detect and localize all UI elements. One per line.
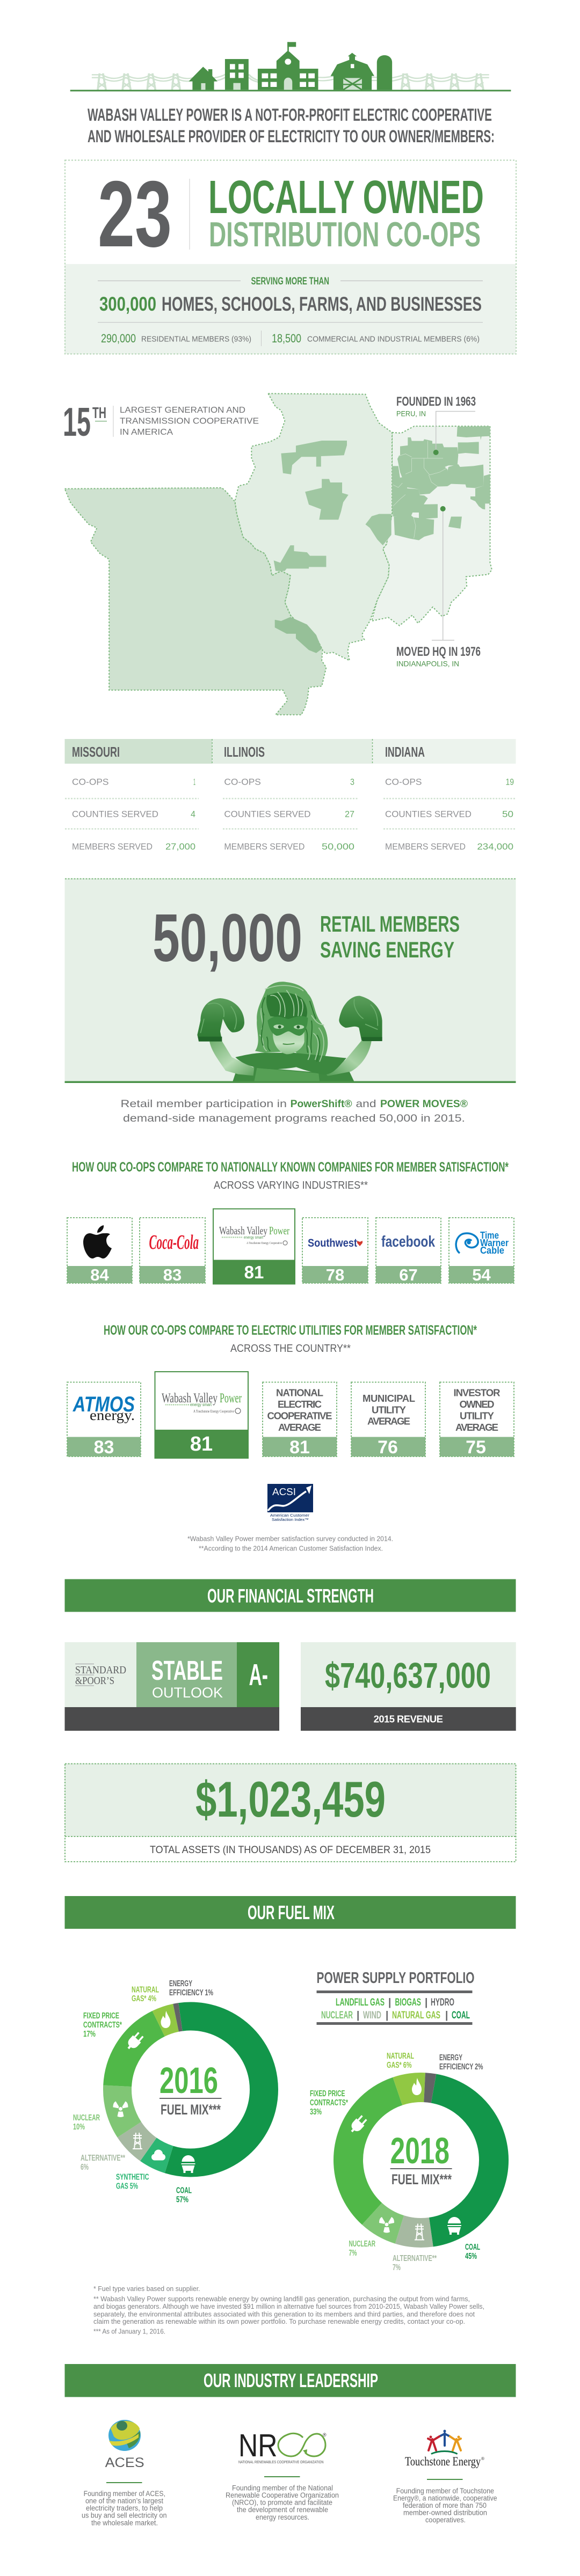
card: Apple 84: 84 [90, 1265, 109, 1284]
panel: total assets: $1,023,459 [195, 1771, 386, 1827]
center label: 2016 [160, 2060, 218, 2101]
card: Facebook 67: 67 [399, 1265, 418, 1284]
card: Wabash Valley Power 81: Wabash Valley [219, 1224, 267, 1237]
ACES description [82, 2490, 167, 2527]
label: moved HQ in 1976: INDIANAPOLIS, IN [396, 659, 459, 668]
card: Wabash Valley Power 81: energy smart [190, 1402, 212, 1407]
footnotes: satisfaction sources [187, 1535, 393, 1552]
section banner: our financial strength: OUR FINANCIAL STRENGTH [207, 1585, 374, 1607]
table: state statistics: 1 [193, 777, 195, 787]
segment labels: 17% [83, 2030, 96, 2039]
panel: 2015 revenue [301, 1642, 516, 1731]
segment icons [113, 2011, 195, 2173]
power supply portfolio legend: | [386, 2010, 388, 2021]
column: Missouri: 4 [191, 809, 195, 819]
center label [160, 2060, 221, 2118]
intro statement [88, 105, 495, 146]
panel: Standard and Poor's rating [64, 1642, 279, 1731]
Touchstone description: federation of more than 750 [403, 2501, 487, 2509]
card: Facebook 67 [381, 1233, 436, 1284]
panel: 2015 revenue: $740,637,000 [325, 1656, 491, 1696]
segment labels: GAS 5% [116, 2182, 138, 2191]
score cards: national companies [67, 1209, 514, 1285]
15th largest callout [63, 399, 259, 444]
table: state statistics [64, 739, 516, 852]
Touchstone description: cooperatives. [425, 2516, 466, 2524]
card: Time Warner Cable 54: 54 [472, 1265, 491, 1284]
Touchstone description: member-owned distribution [403, 2508, 487, 2517]
power supply portfolio legend: POWER SUPPLY PORTFOLIO [317, 1970, 475, 1987]
column: Indiana: COUNTIES SERVED [385, 809, 472, 819]
state: Indiana [372, 426, 492, 626]
section banner: our fuel mix: OUR FUEL MIX [248, 1901, 335, 1923]
card: national electric cooperative average 81: COOPERATIVE [267, 1410, 332, 1421]
segment labels: CONTRACTS* [310, 2098, 349, 2107]
panel: 2015 revenue: 2015 REVENUE [374, 1713, 443, 1725]
score cards: electric utilities [67, 1372, 514, 1458]
logo: Touchstone Energy [405, 2430, 484, 2468]
power supply portfolio legend: | [388, 1997, 391, 2008]
ACES description: Founding member of ACES, [84, 2490, 165, 2498]
segment labels: NUCLEAR [73, 2113, 100, 2123]
label: moved HQ in 1976: MOVED HQ IN 1976 [396, 645, 481, 659]
NRCO description: energy resources. [256, 2513, 309, 2521]
column: Missouri: 27,000 [165, 841, 195, 852]
homes statement: 300,000 [99, 293, 156, 315]
panel: total assets: TOTAL ASSETS (IN THOUSANDS) AS OF DECEMBER 31, 2015 [150, 1845, 431, 1856]
S&P wordmark: &POOR’S [75, 1675, 114, 1687]
logo: ACSI: American Customer [270, 1513, 310, 1518]
map: Missouri, Illinois, Indiana service territory [65, 393, 492, 715]
card: Wabash Valley Power 81 [213, 1209, 295, 1285]
leader lines and location pins [432, 411, 475, 640]
S&P wordmark [75, 1664, 126, 1687]
card: municipal utility average 76: 76 [378, 1437, 398, 1458]
card: Apple 84 [83, 1225, 112, 1284]
logo: NRCO: NATIONAL RENEWABLES COOPERATIVE ORGANIZATION [238, 2460, 324, 2464]
text block: retail participation: Retail member participation in [120, 1098, 287, 1110]
column: Illinois: MEMBERS SERVED [224, 841, 305, 852]
member breakdown: 290,000 [101, 332, 136, 345]
column: Indiana: 50 [502, 809, 513, 819]
segment labels: NATURAL [132, 1986, 159, 1994]
label: founded in 1963: FOUNDED IN 1963 [396, 394, 476, 409]
segment labels: EFFICIENCY 2% [439, 2062, 483, 2072]
text block: retail participation: demand-side management programs reached 50,000 in 2015. [123, 1113, 465, 1124]
segment labels: COAL [176, 2186, 192, 2196]
segment labels [310, 2052, 483, 2272]
column: Illinois: CO-OPS [224, 777, 261, 787]
column: Illinois: COUNTIES SERVED [224, 809, 310, 819]
column: Missouri: COUNTIES SERVED [72, 809, 158, 819]
center label: FUEL MIX*** [161, 2102, 221, 2118]
column: Indiana: INDIANA [385, 744, 425, 760]
card: Atmos Energy 83: 83 [94, 1437, 114, 1458]
card: Wabash Valley Power 81: A Touchstone Energy Cooperative [247, 1242, 282, 1245]
card: municipal utility average 76 [363, 1393, 415, 1458]
card: Atmos Energy 83: energy. [90, 1407, 135, 1423]
card: Southwest 78: 78 [326, 1265, 344, 1284]
segment labels: SYNTHETIC [116, 2173, 149, 2182]
card: national electric cooperative average 81: AVERAGE [278, 1422, 321, 1433]
footnotes: fuel mix: and biogas generators. Although we have invested $91 million in alternative fuel sources from 2010-2015, Wabash Valley Power sells, [93, 2302, 484, 2310]
segment labels: 33% [310, 2107, 322, 2117]
ACES description: one of the nation’s largest [85, 2497, 163, 2505]
member breakdown: RESIDENTIAL MEMBERS (93%) [141, 335, 251, 343]
segment labels: 6% [81, 2163, 89, 2172]
card: Wabash Valley Power 81 [155, 1372, 248, 1458]
panel: 50,000 retail members [64, 879, 516, 1083]
segment labels: FIXED PRICE [310, 2089, 345, 2098]
segment labels: EFFICIENCY 1% [169, 1988, 213, 1997]
card: Wabash Valley Power 81: Wabash Valley [162, 1391, 218, 1406]
Touchstone description [393, 2487, 497, 2524]
text block: retail participation: and [356, 1098, 376, 1110]
footnotes: fuel mix: separately, the environmental attributes associated with this generation to its members and third parties, and therefore does not [93, 2310, 475, 2318]
card: Southwest 78: Southwest [308, 1237, 357, 1249]
footnotes: fuel mix: *** As of January 1, 2016. [93, 2327, 165, 2336]
Touchstone description: Energy®, a nationwide, cooperative [393, 2494, 497, 2502]
card: investor owned utility average 75: INVESTOR [453, 1387, 501, 1399]
heading: national companies comparison [72, 1160, 509, 1191]
card: Wabash Valley Power 81: A Touchstone Energy Cooperative [193, 1409, 234, 1414]
panel: 23 locally owned co-ops [64, 160, 516, 354]
Touchstone description: Founding member of Touchstone [396, 2487, 494, 2495]
logo: ACES globe: ACES [105, 2455, 144, 2470]
card: municipal utility average 76: UTILITY [372, 1404, 407, 1416]
stable outlook: STABLE [151, 1655, 223, 1686]
NRCO description: the development of renewable [237, 2506, 328, 2514]
column: Indiana: MEMBERS SERVED [385, 841, 466, 852]
center label: FUEL MIX*** [392, 2171, 452, 2187]
column: Missouri [72, 744, 195, 852]
segment icons [348, 2078, 461, 2240]
card: Time Warner Cable 54: Warner [480, 1238, 509, 1248]
headline [208, 171, 484, 254]
power supply portfolio legend: LANDFILL GAS [336, 1997, 385, 2008]
segment labels: NUCLEAR [349, 2240, 375, 2249]
card: national electric cooperative average 81: ELECTRIC [278, 1399, 322, 1410]
footnotes: fuel mix [93, 2285, 484, 2336]
logo: ACSI [267, 1484, 313, 1522]
15th largest callout: TH [92, 405, 106, 422]
column: Missouri: MEMBERS SERVED [72, 841, 153, 852]
column: Missouri: CO-OPS [72, 777, 108, 787]
footnotes: fuel mix: claim the generation as renewable within its own power portfolio. To purchase renewable energy credits, contact your co-op. [93, 2317, 465, 2325]
card: investor owned utility average 75: OWNED [460, 1399, 494, 1410]
Indiana county blocks [392, 426, 490, 540]
column: Touchstone Energy [393, 2430, 497, 2524]
logo: NRCO: NR [238, 2428, 277, 2463]
power supply portfolio legend: NUCLEAR [321, 2010, 353, 2021]
ACES description: us buy and sell electricity on [82, 2512, 167, 2519]
ACES description: the wholesale market. [91, 2519, 158, 2527]
card: Wabash Valley Power 81: Power [220, 1391, 242, 1406]
power supply portfolio legend: COAL [452, 2010, 470, 2021]
retail members heading [320, 911, 460, 962]
segment labels: 57% [176, 2196, 189, 2205]
column: Indiana: CO-OPS [385, 777, 422, 787]
column: Indiana: 234,000 [477, 841, 513, 852]
segment labels: GAS* 6% [387, 2061, 411, 2070]
15th largest callout: IN AMERICA [120, 428, 173, 437]
segment labels: 7% [349, 2249, 357, 2258]
big number 50,000: 50,000 [153, 900, 302, 976]
segment labels: GAS* 4% [132, 1994, 156, 2003]
15th largest callout: TRANSMISSION COOPERATIVE [120, 416, 259, 426]
center label: 2018 [390, 2130, 450, 2171]
section banner: our industry leadership: OUR INDUSTRY LEADERSHIP [204, 2369, 378, 2391]
card: Facebook 67: facebook [381, 1233, 436, 1250]
segment labels: 45% [465, 2252, 477, 2261]
illustration: child superhero with boxing gloves [197, 982, 382, 1081]
segment labels: ENERGY [169, 1979, 192, 1988]
big number 23: 23 [98, 162, 172, 267]
card: national electric cooperative average 81: NATIONAL [276, 1387, 323, 1399]
footnotes: satisfaction sources: *Wabash Valley Power member satisfaction survey conducted in 2014. [187, 1535, 393, 1542]
card: Wabash Valley Power 81: energy smart [244, 1236, 263, 1240]
label: founded in 1963: PERU, IN [396, 409, 426, 418]
heading: national companies comparison: ACROSS VARYING INDUSTRIES** [214, 1180, 368, 1191]
power supply portfolio legend [317, 1970, 475, 2025]
logo: NRCO: ® [323, 2432, 327, 2438]
section banner: our financial strength [64, 1579, 516, 1612]
panel: total assets [64, 1763, 516, 1862]
logo: Touchstone Energy: ® [481, 2456, 484, 2461]
segment labels: 10% [73, 2123, 85, 2132]
card: Atmos Energy 83: ATMOS [73, 1393, 135, 1416]
segment labels: COAL [465, 2243, 480, 2252]
column: Illinois: 3 [350, 777, 354, 787]
NRCO description: Renewable Cooperative Organization [226, 2491, 339, 2499]
retail members heading: RETAIL MEMBERS [320, 911, 460, 936]
icon: town skyline with power lines [70, 42, 511, 91]
power supply portfolio legend: WIND [363, 2010, 381, 2021]
homes statement [99, 293, 482, 315]
segment labels: CONTRACTS* [83, 2021, 122, 2030]
S&P wordmark: STANDARD [75, 1664, 126, 1676]
column: Indiana [385, 744, 514, 852]
logo: Touchstone Energy: Touchstone Energy [405, 2455, 481, 2468]
center label [390, 2130, 452, 2187]
segment labels: FIXED PRICE [83, 2011, 119, 2021]
logo: ACES globe [105, 2420, 144, 2470]
footnotes: fuel mix: * Fuel type varies based on supplier. [93, 2285, 200, 2293]
segment labels: ALTERNATIVE** [393, 2254, 437, 2263]
power supply portfolio legend: BIOGAS [395, 1997, 421, 2008]
card: investor owned utility average 75: UTILITY [460, 1410, 495, 1421]
card: Wabash Valley Power 81: 81 [244, 1262, 264, 1282]
retail members heading: SAVING ENERGY [320, 937, 454, 962]
donut chart: 2016 fuel mix [73, 1979, 293, 2205]
section banner: our industry leadership [64, 2364, 516, 2397]
donut chart: 2018 fuel mix [310, 2052, 524, 2272]
member breakdown: COMMERCIAL AND INDUSTRIAL MEMBERS (6%) [307, 335, 480, 343]
segment labels: 7% [393, 2263, 401, 2272]
segment labels [73, 1979, 213, 2205]
state: Missouri [65, 488, 326, 715]
state: Illinois [235, 393, 392, 661]
segment labels: ENERGY [439, 2053, 462, 2062]
card: Coca-Cola 83 [149, 1231, 199, 1284]
power supply portfolio legend: | [357, 2010, 359, 2021]
text block: retail participation: POWER MOVES® [380, 1098, 468, 1110]
column: Missouri: MISSOURI [72, 744, 120, 760]
15th largest callout: LARGEST GENERATION AND [120, 406, 245, 415]
stable outlook [151, 1655, 223, 1701]
power supply portfolio legend: | [445, 2010, 448, 2021]
column: ACES [82, 2420, 167, 2527]
card: municipal utility average 76: AVERAGE [367, 1416, 410, 1426]
15th largest callout: 15 [63, 399, 91, 444]
segment labels: NATURAL [387, 2052, 414, 2061]
label: founded in 1963 [396, 394, 476, 418]
column: Illinois: ILLINOIS [224, 744, 265, 760]
NRCO description: Founding member of the National [232, 2484, 333, 2492]
card: investor owned utility average 75: 75 [466, 1437, 486, 1458]
text block: retail participation: PowerShift® [291, 1098, 352, 1110]
card: investor owned utility average 75: AVERAGE [455, 1422, 498, 1433]
column: Illinois: 27 [345, 809, 354, 819]
NRCO description: (NRCO), to promote and facilitate [232, 2499, 332, 2506]
column: Illinois [224, 744, 354, 852]
card: Time Warner Cable 54 [456, 1230, 509, 1284]
card: national electric cooperative average 81 [267, 1387, 332, 1458]
footnotes: fuel mix: ** Wabash Valley Power supports renewable energy by owning landfill gas generation, purchasing the output from wind farms, [93, 2295, 470, 2303]
serving more than: SERVING MORE THAN [251, 276, 329, 287]
card: Time Warner Cable 54: Cable [480, 1245, 504, 1256]
card: municipal utility average 76: MUNICIPAL [363, 1393, 415, 1404]
rating A-: A- [249, 1658, 268, 1692]
card: Wabash Valley Power 81: Power [269, 1224, 289, 1237]
card: investor owned utility average 75 [453, 1387, 501, 1458]
section banner: our fuel mix [64, 1896, 516, 1929]
logo: ACSI: ACSI [272, 1487, 296, 1497]
member breakdown [101, 331, 480, 346]
logo: NRCO [238, 2428, 327, 2464]
card: Atmos Energy 83 [73, 1393, 135, 1458]
NRCO description [226, 2484, 339, 2521]
card: Coca-Cola 83: Coca-Cola [149, 1231, 199, 1254]
heading: electric utilities comparison [104, 1323, 477, 1355]
ACES description: electricity traders, to help [86, 2504, 163, 2512]
stable outlook: OUTLOOK [152, 1685, 223, 1701]
power supply portfolio legend: | [425, 1997, 427, 2008]
power supply portfolio legend: HYDRO [431, 1997, 454, 2008]
card: Coca-Cola 83: 83 [163, 1265, 182, 1284]
label: moved HQ in 1976 [396, 645, 481, 668]
power supply portfolio legend: NATURAL GAS [392, 2010, 440, 2021]
card: Wabash Valley Power 81: 81 [190, 1433, 213, 1455]
text block: retail participation [120, 1098, 468, 1124]
card: national electric cooperative average 81: 81 [289, 1437, 310, 1458]
card: Southwest 78 [308, 1237, 363, 1284]
logo: ACSI: Satisfaction Index™ [272, 1517, 309, 1522]
footnotes: satisfaction sources: **According to the 2014 American Customer Satisfaction Index. [199, 1545, 383, 1552]
member breakdown: 18,500 [272, 332, 301, 345]
heading: electric utilities comparison: ACROSS THE COUNTRY** [230, 1343, 351, 1355]
column: NRCO [226, 2428, 339, 2521]
column: Illinois: 50,000 [322, 841, 354, 852]
segment labels: ALTERNATIVE** [81, 2154, 126, 2163]
card: Time Warner Cable 54: Time [480, 1230, 499, 1241]
column: Indiana: 19 [506, 777, 514, 787]
